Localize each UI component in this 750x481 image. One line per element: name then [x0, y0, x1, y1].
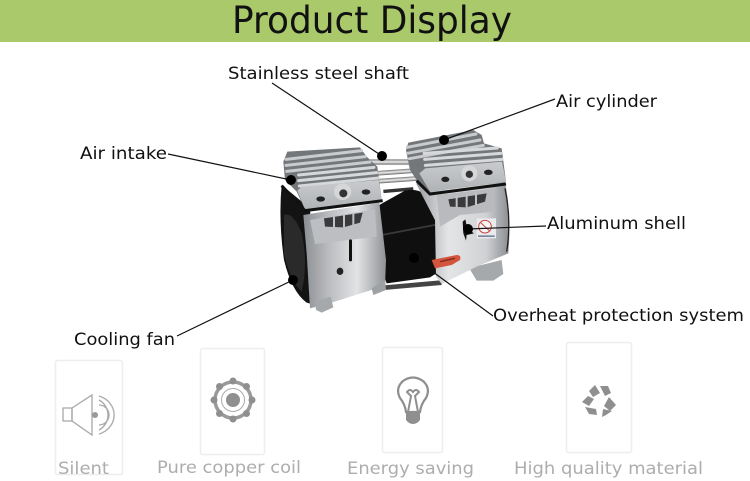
motor cylinder [373, 190, 442, 283]
callout: Aluminum shell [463, 214, 686, 234]
icon: light bulb [398, 378, 428, 424]
right fin block [406, 130, 506, 194]
callout: Cooling fan [74, 275, 298, 350]
callout: Overheat protection system [409, 253, 744, 326]
icon: speaker [63, 395, 114, 435]
left housing [303, 203, 386, 308]
title banner [0, 0, 750, 42]
overheat switch [432, 255, 460, 268]
feature: Energy saving: Energy saving [347, 459, 474, 479]
no-symbol sticker [477, 218, 496, 238]
shaft rods [370, 159, 442, 291]
feature: Silent [56, 360, 122, 479]
left fin block [282, 147, 383, 211]
feature: Pure copper coil [157, 348, 301, 478]
feature: High quality material: High quality material [514, 459, 703, 479]
air compressor product photo [280, 130, 509, 313]
right housing [416, 182, 509, 284]
callout: Cooling fan: Cooling fan [74, 330, 175, 350]
left black fan cover [280, 185, 315, 305]
callout: Air cylinder [439, 92, 657, 145]
icon: coil [210, 378, 256, 422]
feature: Pure copper coil: Pure copper coil [157, 458, 301, 478]
callout: Air intake [80, 144, 296, 185]
icon: recycle [582, 385, 616, 417]
callout: Air cylinder: Air cylinder [556, 92, 657, 112]
callout: Stainless steel shaft [228, 64, 409, 161]
callout: Air intake: Air intake [80, 144, 167, 164]
left feet [315, 297, 333, 313]
right feet [468, 260, 503, 281]
feature: Silent: Silent [58, 459, 109, 479]
title: Product Display [232, 0, 512, 42]
callout: Overheat protection system: Overheat protection system [493, 306, 744, 326]
feature: Energy saving [347, 348, 474, 479]
callout: Aluminum shell: Aluminum shell [547, 214, 686, 234]
feature: High quality material [514, 342, 703, 479]
callout: Stainless steel shaft: Stainless steel shaft [228, 64, 409, 84]
